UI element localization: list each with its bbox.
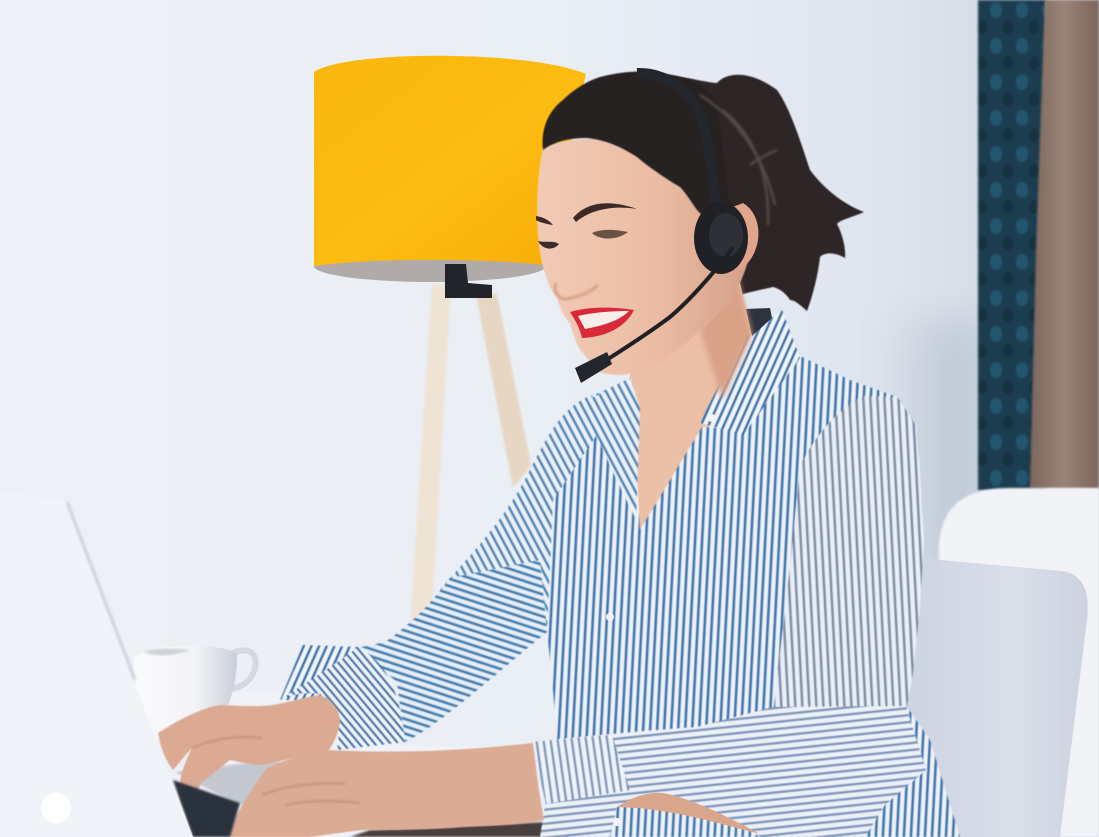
- shaded wall beside curtain: [870, 320, 980, 580]
- patterned blue curtain: [978, 0, 1046, 490]
- face: [537, 139, 750, 375]
- microphone tip: [575, 352, 612, 383]
- lampshade: [314, 56, 586, 266]
- teeth: [578, 311, 629, 329]
- white sofa: [939, 488, 1099, 837]
- lower right sleeve: [532, 706, 926, 837]
- shirt upper right sleeve: [773, 396, 924, 712]
- floor lamp: [314, 56, 586, 628]
- microphone arm: [608, 247, 733, 359]
- left hand: [158, 695, 340, 811]
- right collar: [700, 310, 800, 435]
- earpiece: [694, 202, 748, 274]
- exposed arm: [617, 793, 760, 834]
- headband: [637, 73, 716, 212]
- cuff folded edge: [532, 735, 630, 804]
- desk: [190, 692, 560, 837]
- hair front: [543, 72, 735, 250]
- cup inner rim: [144, 649, 190, 655]
- left cuff: [280, 645, 405, 750]
- cuff band: [280, 647, 405, 750]
- left collar: [588, 378, 640, 520]
- hair side strands: [700, 95, 778, 225]
- lampshade underside: [314, 250, 546, 282]
- headset: [575, 73, 748, 383]
- keyboard: [173, 780, 240, 837]
- screen edge: [67, 502, 135, 680]
- neck shadow: [700, 275, 752, 400]
- cup handle: [232, 650, 256, 689]
- curtains: [978, 0, 1099, 490]
- laptop: [0, 492, 240, 837]
- lips: [570, 308, 634, 338]
- cup body: [134, 645, 237, 740]
- agent: [158, 72, 960, 837]
- ponytail and hair back: [650, 74, 864, 311]
- shirt torso: [547, 355, 960, 837]
- laptop screen back: [0, 492, 193, 837]
- laptop base: [175, 760, 420, 830]
- collar inner band: [746, 308, 772, 336]
- nose shadow: [555, 283, 598, 299]
- neck and chest: [630, 270, 752, 530]
- ear: [725, 203, 758, 276]
- eyebrows: [536, 203, 637, 225]
- white chair: [905, 558, 1088, 837]
- lamp joint: [445, 264, 492, 298]
- brown curtain: [1030, 0, 1099, 489]
- eyes: [538, 230, 628, 249]
- left sleeve lower: [357, 560, 547, 742]
- cuff flap: [280, 645, 360, 700]
- coffee cup: [134, 645, 256, 740]
- left sleeve upper: [440, 395, 600, 640]
- shirt buttons: [606, 414, 716, 826]
- tripod legs: [410, 284, 531, 628]
- dark table edge: [350, 822, 560, 837]
- right forearm and hand: [228, 743, 544, 837]
- white logo dot: [41, 793, 71, 823]
- finger shadows: [192, 737, 360, 805]
